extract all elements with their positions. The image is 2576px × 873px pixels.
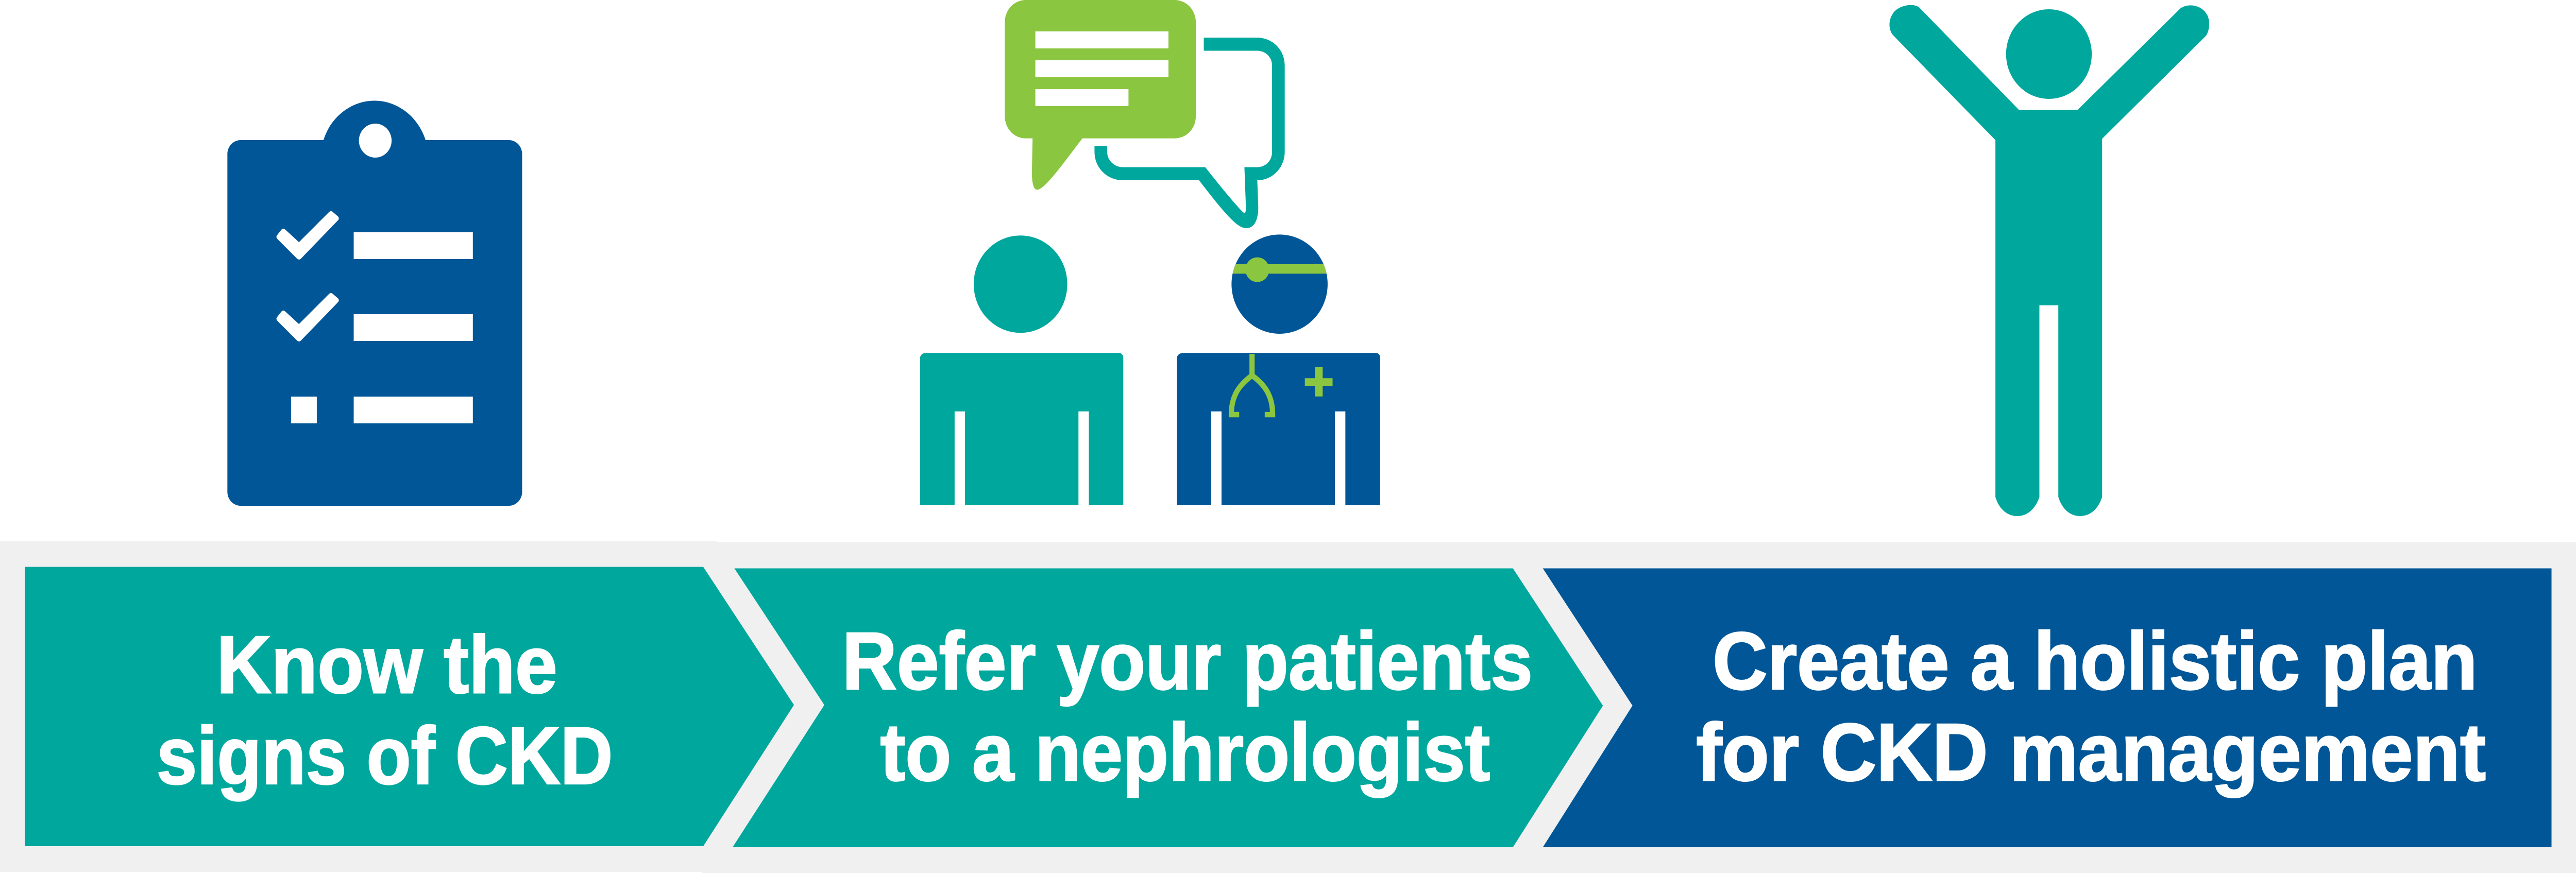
- list line two: [354, 314, 473, 341]
- panel text: for CKD management: [1696, 707, 2486, 798]
- icon: clipboard checklist: [227, 101, 522, 506]
- list line one: [354, 232, 473, 259]
- checkmark two: [279, 296, 336, 339]
- icon: doctor: [1177, 234, 1380, 505]
- panel text: [842, 615, 1533, 798]
- list line three: [354, 397, 473, 423]
- panel text: to a nephrologist: [880, 707, 1490, 798]
- icon: patient: [920, 235, 1123, 505]
- checkmark one: [279, 214, 336, 257]
- head mirror: [1229, 258, 1331, 282]
- panel text: Refer your patients: [842, 615, 1533, 706]
- panel text: signs of CKD: [157, 710, 613, 801]
- icon: teal outlined speech bubble: [1094, 38, 1285, 228]
- panel: holistic plan: [1543, 569, 2551, 847]
- stethoscope: [1231, 354, 1273, 415]
- panel text: [1696, 615, 2486, 798]
- icon: person with raised arms: [1889, 5, 2209, 516]
- panel text: Create a holistic plan: [1713, 615, 2478, 706]
- panel: know the signs: [25, 567, 794, 846]
- panel text: [157, 619, 613, 801]
- banner background: [0, 541, 2576, 873]
- panel: refer to a nephrologist: [733, 569, 1603, 847]
- medical cross: [1305, 367, 1333, 397]
- icon: green speech bubble: [1005, 0, 1196, 190]
- checkbox square: [291, 397, 317, 423]
- panel text: Know the: [216, 619, 557, 710]
